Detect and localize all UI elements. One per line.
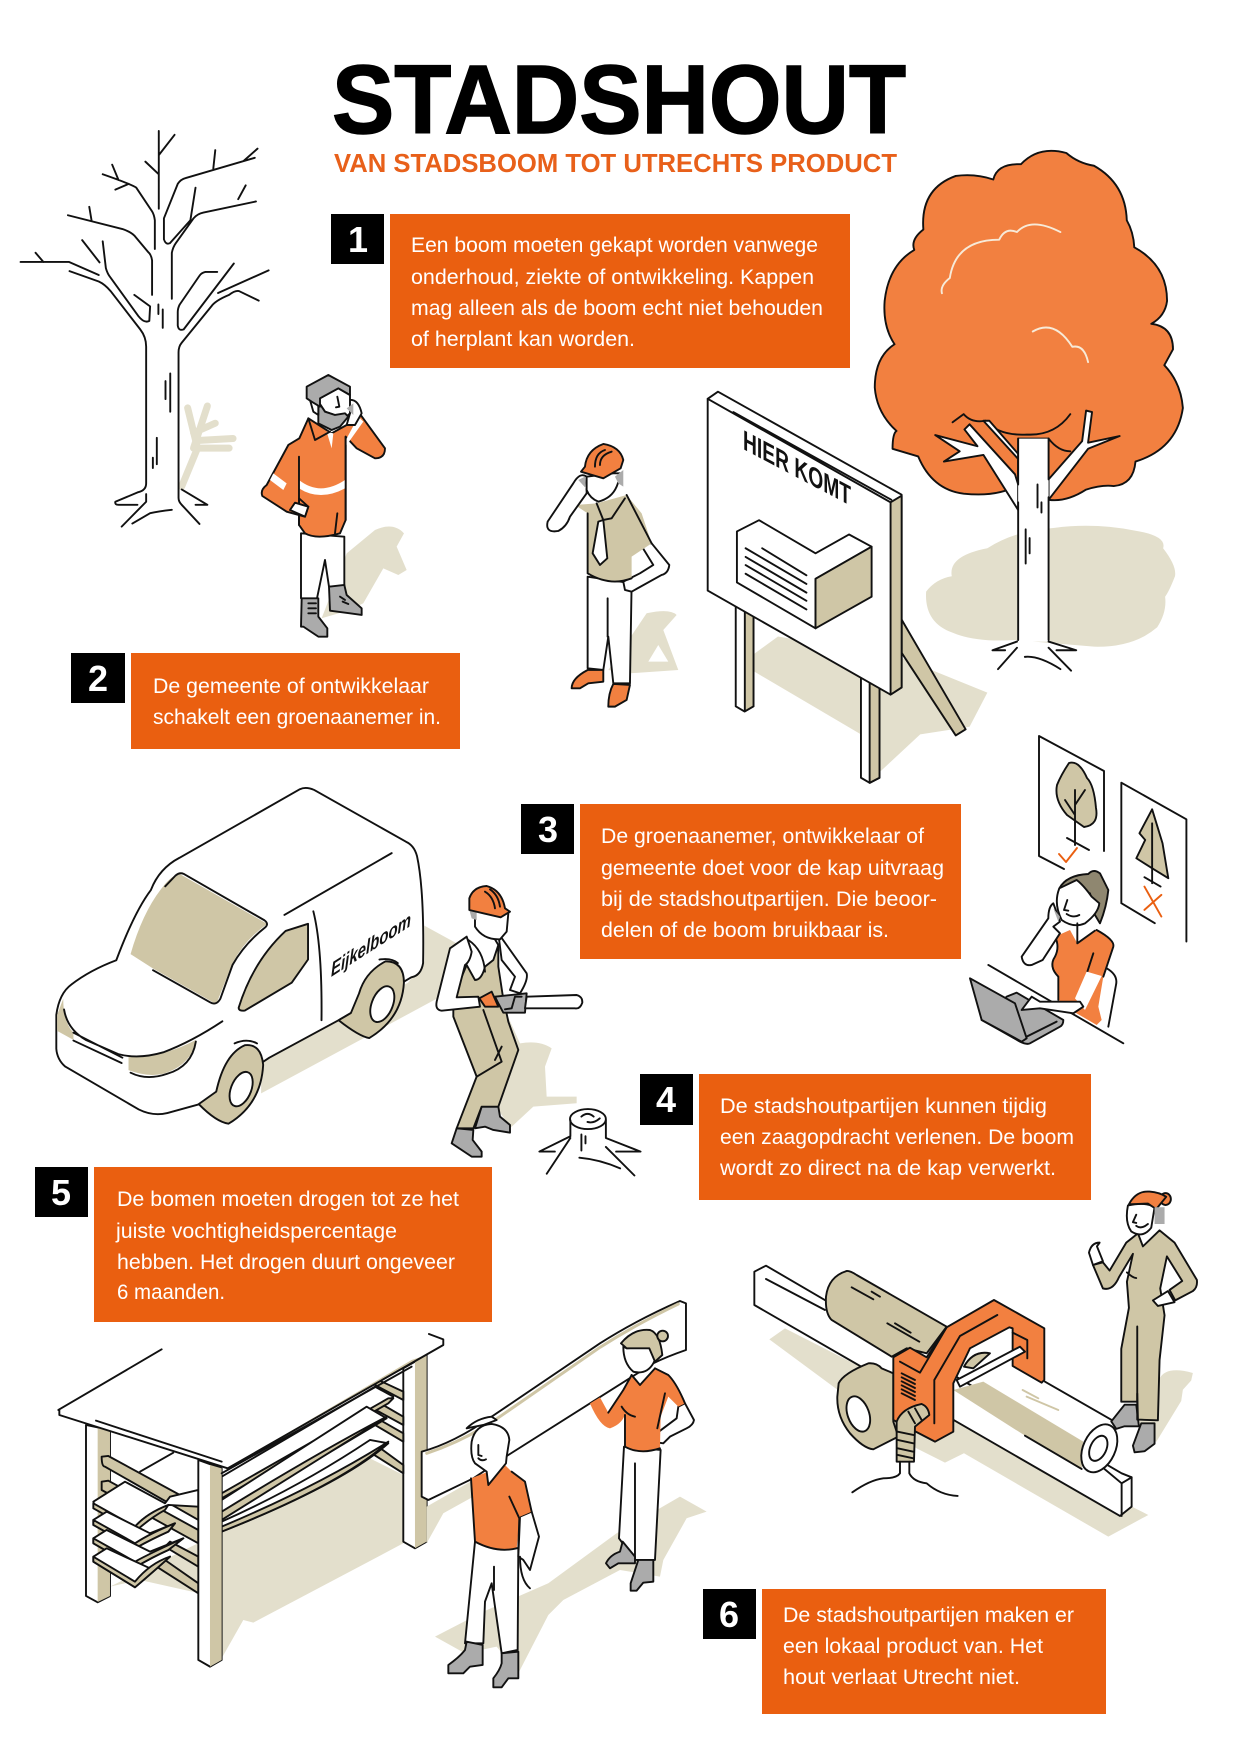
- step 4: 4: [656, 1079, 676, 1120]
- van lettering: Eijkelboom: [331, 907, 411, 982]
- step 1: [331, 214, 850, 368]
- illustration: woman in khaki suit with ear protection: [1089, 1192, 1197, 1452]
- step 5: 5: [51, 1172, 71, 1213]
- step 6: een lokaal product van. Het: [783, 1634, 1043, 1658]
- illustration: two workers carrying a plank: [422, 1301, 707, 1687]
- illustration: poster with approved tree: [1039, 736, 1104, 869]
- step 4: [640, 1074, 1091, 1200]
- step 4: wordt zo direct na de kap verwerkt.: [719, 1156, 1056, 1180]
- illustration: poster with rejected tree: [1121, 783, 1186, 942]
- illustration: woman at laptop on the phone: [970, 871, 1123, 1044]
- step 3: delen of de boom bruikbaar is.: [601, 918, 889, 942]
- step 5: [35, 1167, 492, 1322]
- step 4: een zaagopdracht verlenen. De boom: [720, 1125, 1074, 1149]
- illustration: construction sign HIER KOMT: [708, 392, 987, 783]
- illustration: orange tree: [875, 151, 1183, 671]
- illustration: man in orange shirt on the phone: [262, 375, 407, 637]
- illustration: man with hard hat and tie on the phone: [547, 444, 678, 707]
- step 3: bij de stadshoutpartijen. Die beoor-: [601, 887, 937, 911]
- step 2: [71, 653, 460, 749]
- step 3: De groenaanemer, ontwikkelaar of: [601, 824, 924, 848]
- step 1: mag alleen als de boom echt niet behouden: [411, 296, 823, 320]
- subtitle: VAN STADSBOOM TOT UTRECHTS PRODUCT: [334, 150, 897, 178]
- step 6: De stadshoutpartijen maken er: [783, 1603, 1074, 1627]
- step 2: 2: [88, 658, 108, 699]
- step 5: hebben. Het drogen duurt ongeveer: [117, 1250, 455, 1274]
- title: STADSHOUT: [332, 45, 906, 154]
- step 1: of herplant kan worden.: [411, 327, 635, 351]
- illustration: tree stump: [539, 1109, 641, 1176]
- step 1: 1: [348, 219, 368, 260]
- step 2: schakelt een groenaanemer in.: [153, 705, 441, 729]
- step 3: gemeente doet voor de kap uitvraag: [601, 856, 944, 880]
- illustration: drying rack with planks: [58, 1323, 443, 1667]
- step 1: Een boom moeten gekapt worden vanwege: [411, 233, 818, 257]
- sign text: HIER KOMT: [743, 425, 851, 513]
- illustration: bare tree: [21, 131, 269, 527]
- step 1: onderhoud, ziekte of ontwikkeling. Kappen: [411, 265, 814, 289]
- step 4: De stadshoutpartijen kunnen tijdig: [720, 1094, 1047, 1118]
- step 3: 3: [538, 809, 558, 850]
- step 2: De gemeente of ontwikkelaar: [153, 674, 429, 698]
- step 6: hout verlaat Utrecht niet.: [783, 1665, 1020, 1689]
- step 3: [521, 804, 961, 959]
- illustration: saw machine and log: [754, 1266, 1148, 1537]
- step 5: De bomen moeten drogen tot ze het: [117, 1187, 459, 1211]
- step 5: juiste vochtigheidspercentage: [115, 1219, 397, 1243]
- illustration: lumberjack with chainsaw: [436, 886, 582, 1157]
- illustration: van Eijkelboom: [56, 788, 457, 1124]
- step 6: 6: [719, 1594, 739, 1635]
- step 6: [703, 1589, 1106, 1714]
- step 5: 6 maanden.: [117, 1280, 225, 1304]
